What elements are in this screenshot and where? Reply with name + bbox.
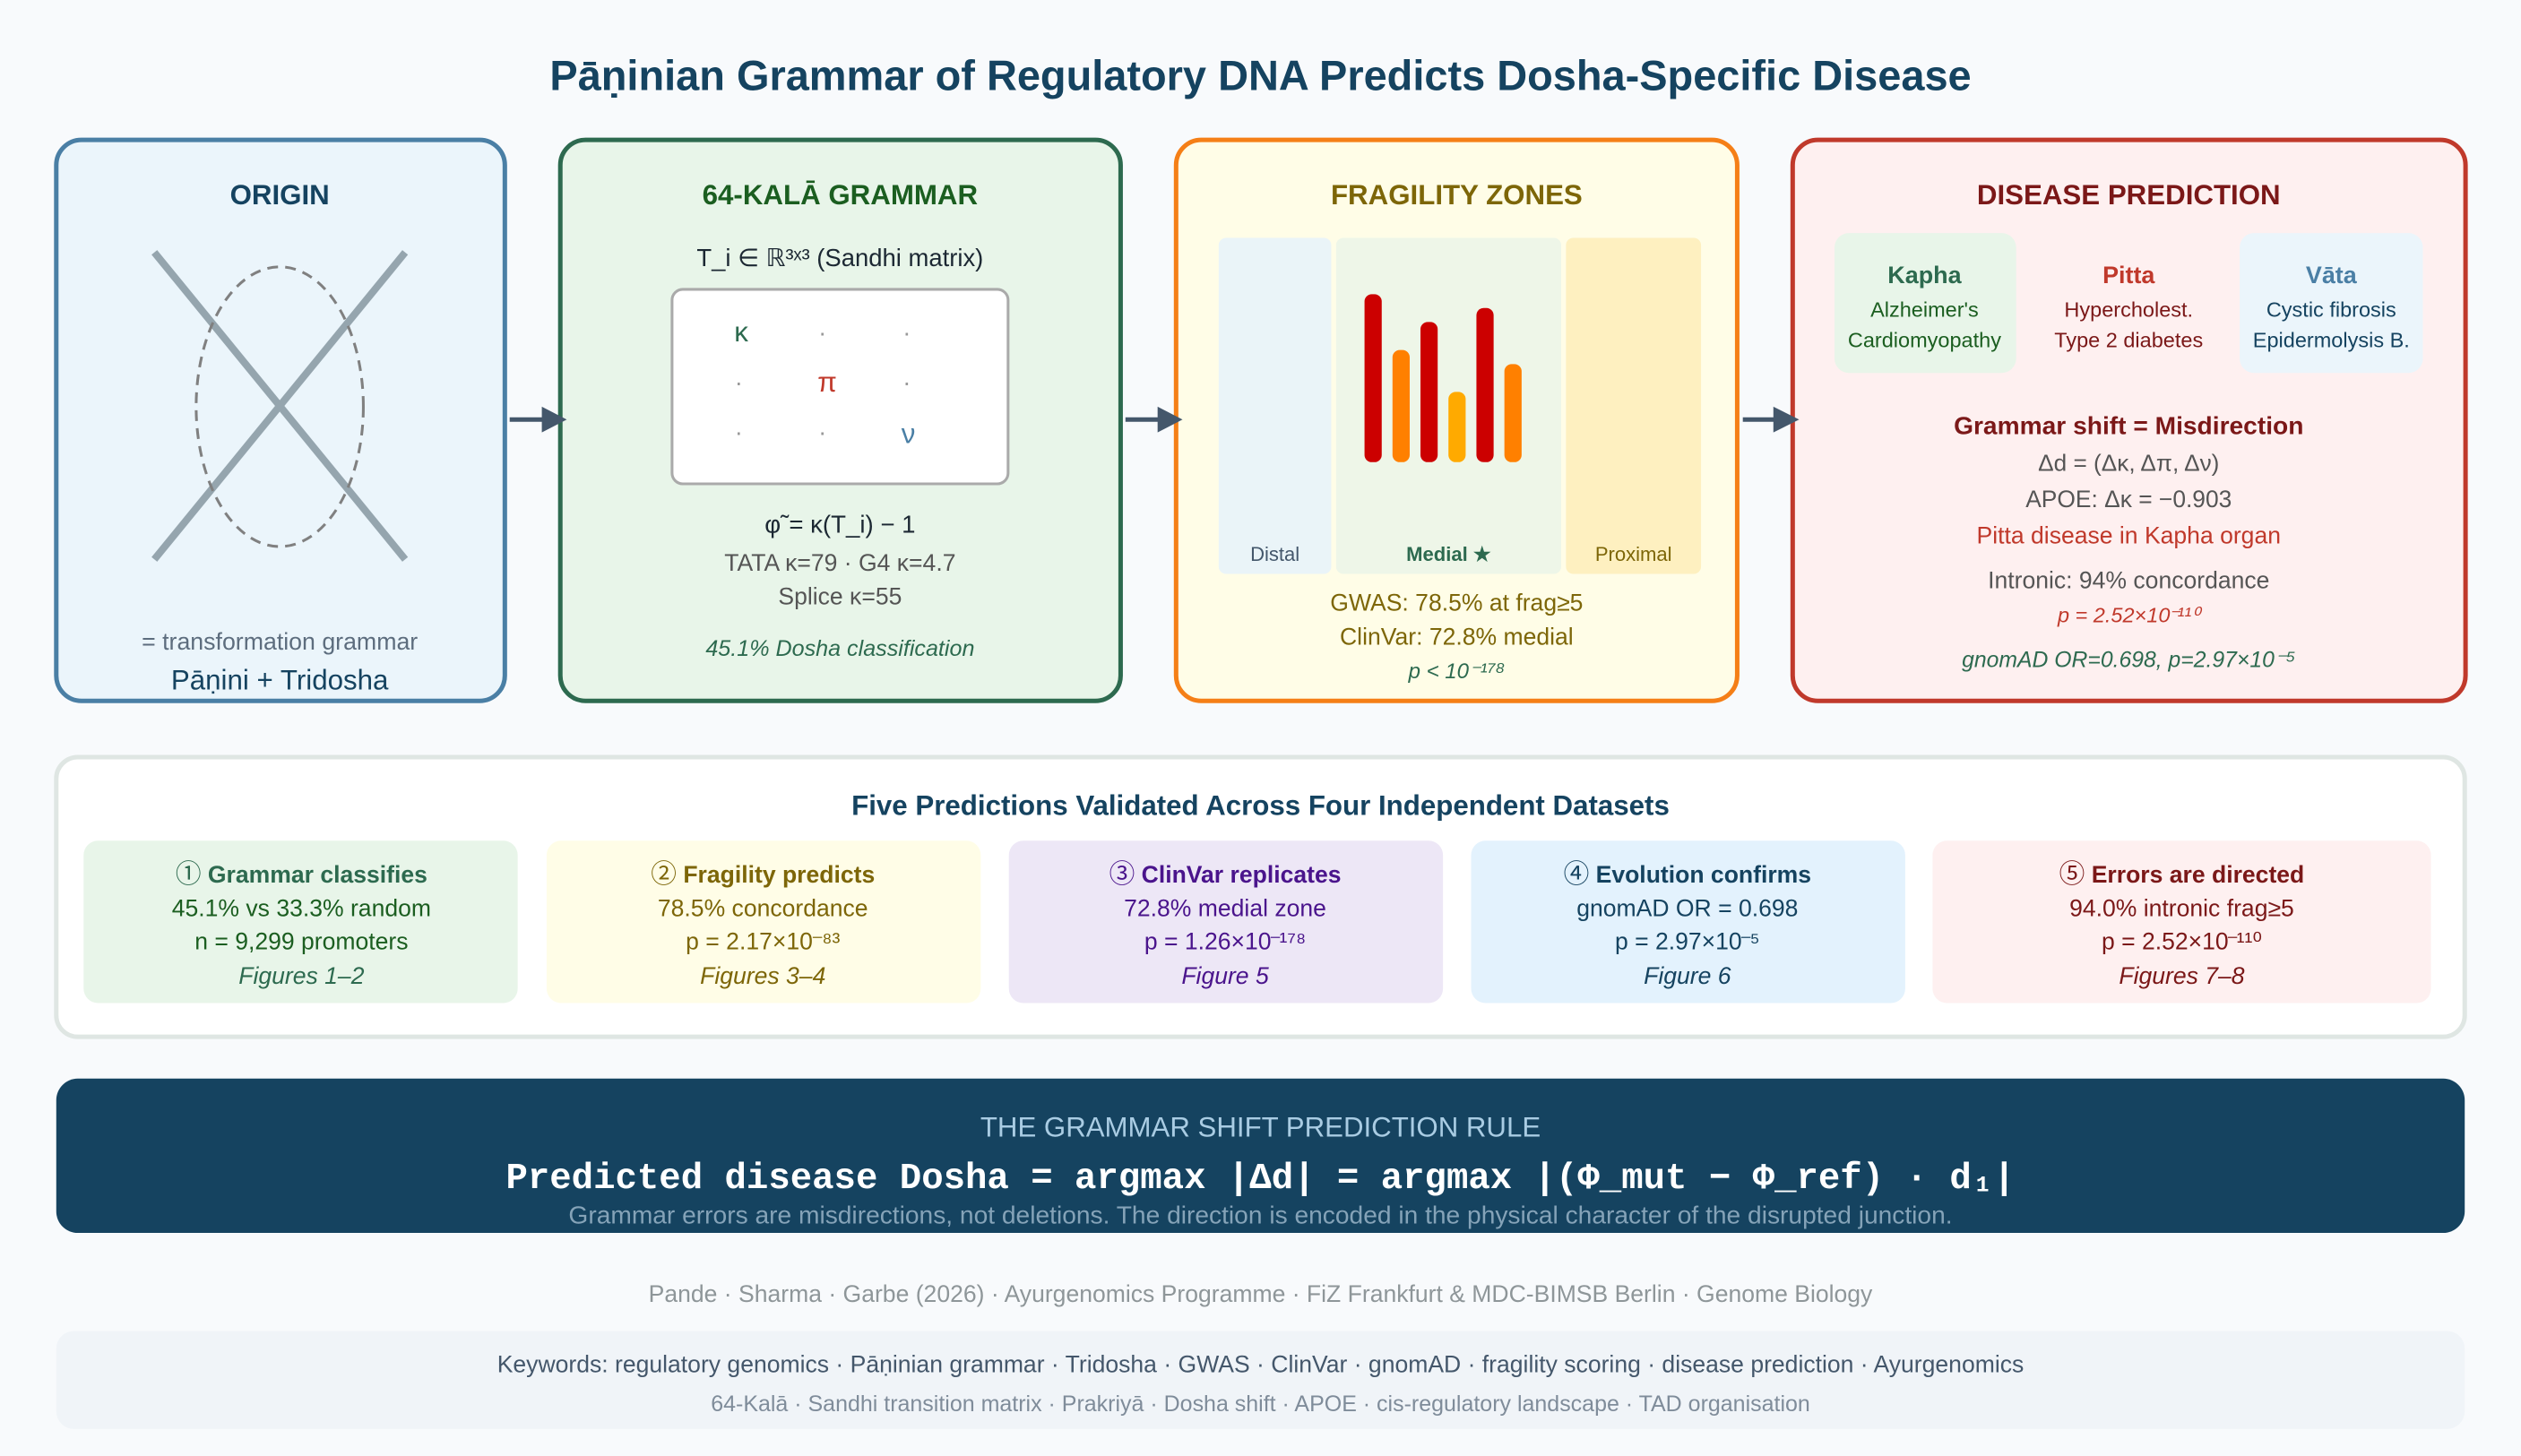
zone: medial: Medial ★ — [1406, 543, 1491, 565]
card: prediction 3: Figure 5 — [1181, 962, 1269, 989]
text: GWAS statistic: GWAS: 78.5% at frag≥5 — [1330, 590, 1583, 616]
card: prediction 2 — [547, 840, 980, 1003]
card: Pitta: Type 2 diabetes — [2054, 329, 2203, 352]
zone: proximal — [1566, 238, 1701, 573]
icon: crossed strands with dashed ellipse — [154, 253, 405, 559]
card: prediction 2: 78.5% concordance — [658, 895, 868, 922]
matrix: 3x3 Sandhi transition: · — [735, 368, 743, 396]
matrix: 3x3 Sandhi transition — [672, 289, 1008, 484]
card: prediction 4 — [1472, 840, 1905, 1003]
card: prediction 4: Figure 6 — [1644, 962, 1731, 989]
text: intronic concordance: Intronic: 94% concordance — [1988, 567, 2269, 594]
heading: disease prediction: DISEASE PREDICTION — [1977, 179, 2281, 211]
matrix: 3x3 Sandhi transition: · — [902, 368, 911, 396]
card: prediction 5: ⑤ Errors are directed — [2059, 854, 2304, 891]
text: intronic p value: p = 2.52×10⁻¹¹⁰ — [2057, 603, 2203, 626]
card: prediction 3 — [1009, 840, 1443, 1003]
card: Kapha: Kapha — [1887, 262, 1963, 289]
text: Pitta in Kapha organ: Pitta disease in Kapha organ — [1977, 521, 2281, 548]
formula: delta d: Δd = (Δκ, Δπ, Δν) — [2038, 450, 2219, 477]
panel: keywords — [56, 1331, 2465, 1429]
card: prediction 4: ④ Evolution confirms — [1564, 854, 1811, 891]
text: grammar shift heading: Grammar shift = Misdirection — [1954, 411, 2303, 439]
card: prediction 5: p = 2.52×10⁻¹¹⁰ — [2102, 928, 2262, 955]
card: prediction 2: p = 2.17×10⁻⁸³ — [686, 928, 841, 955]
matrix: 3x3 Sandhi transition: π — [817, 366, 837, 398]
text: APOE shift: APOE: Δκ = −0.903 — [2025, 486, 2232, 513]
matrix: 3x3 Sandhi transition: κ — [734, 316, 748, 348]
banner: grammar shift prediction rule — [56, 1079, 2465, 1233]
matrix: 3x3 Sandhi transition: · — [818, 418, 826, 446]
zone: distal — [1219, 238, 1331, 573]
matrix: 3x3 Sandhi transition: · — [735, 418, 743, 446]
card: Pitta: Hypercholest. — [2064, 297, 2193, 321]
card: Pitta: Pitta — [2102, 262, 2155, 289]
text: gnomAD statistic: gnomAD OR=0.698, p=2.97×10⁻⁵ — [1962, 649, 2295, 673]
arrow: origin to grammar — [510, 407, 566, 433]
text: splice kappa: Splice κ=55 — [778, 583, 902, 610]
panel: five predictions — [56, 757, 2465, 1037]
title: Pāṇinian Grammar of Regulatory DNA Predicts Dosha-Specific Disease — [549, 52, 1972, 99]
card: prediction 5: Figures 7–8 — [2119, 962, 2245, 989]
text: kappa values: TATA κ=79 · G4 κ=4.7 — [724, 549, 955, 576]
card: prediction 1: Figures 1–2 — [238, 962, 365, 989]
card: Vata — [2240, 233, 2423, 373]
card: prediction 1: n = 9,299 promoters — [194, 928, 409, 955]
card: prediction 5 — [1932, 840, 2431, 1003]
text: Panini + Tridosha: Pāṇini + Tridosha — [171, 665, 389, 696]
panel: disease prediction — [1792, 140, 2465, 701]
heading: fragility zones: FRAGILITY ZONES — [1331, 179, 1583, 211]
zone: proximal: Proximal — [1595, 543, 1672, 565]
card: prediction 1 — [83, 840, 518, 1003]
card: Kapha: Alzheimer's — [1870, 297, 1979, 321]
panel: fragility zones — [1176, 140, 1737, 701]
arrow: fragility to disease — [1743, 407, 1799, 433]
text: transformation grammar: = transformation grammar — [142, 628, 418, 655]
text: keywords line 1: Keywords: regulatory genomics · Pāṇinian grammar · Tridosha · GWAS · ClinVar · gnomAD · fragility scoring · disease prediction · Ayurgenomics — [497, 1350, 2024, 1377]
arrow: grammar to fragility — [1126, 407, 1182, 433]
heading: five predictions: Five Predictions Validated Across Four Independent Datasets — [851, 790, 1670, 822]
card: prediction 4: p = 2.97×10⁻⁵ — [1615, 928, 1760, 955]
panel: origin — [56, 140, 505, 701]
card: Kapha: Cardiomyopathy — [1848, 329, 2001, 352]
card: Vata: Epidermolysis B. — [2253, 329, 2410, 352]
text: banner note: Grammar errors are misdirections, not deletions. The direction is encoded in the physical character of the disrupted junction. — [568, 1201, 1953, 1228]
text: classification accuracy: 45.1% Dosha classification — [705, 636, 974, 661]
panel: 64-Kala grammar — [560, 140, 1120, 701]
text: keywords line 2: 64-Kalā · Sandhi transition matrix · Prakriyā · Dosha shift · APOE · cis-regulatory landscape · TAD organisation — [711, 1391, 1810, 1417]
card: Vata: Vāta — [2306, 262, 2358, 289]
card: Pitta — [2037, 233, 2221, 373]
text: banner label: THE GRAMMAR SHIFT PREDICTION RULE — [980, 1111, 1541, 1142]
matrix: 3x3 Sandhi transition: · — [818, 318, 826, 346]
text: p value: p < 10⁻¹⁷⁸ — [1408, 659, 1505, 684]
text: authors and affiliations: Pande · Sharma · Garbe (2026) · Ayurgenomics Programme · FiZ Frankfurt & MDC-BIMSB Berlin · Genome Biology — [649, 1280, 1873, 1307]
heading: origin: ORIGIN — [230, 179, 330, 211]
card: prediction 1: ① Grammar classifies — [176, 854, 427, 891]
card: prediction 3: p = 1.26×10⁻¹⁷⁸ — [1144, 928, 1306, 955]
heading: 64-Kala grammar: 64-KALĀ GRAMMAR — [703, 179, 978, 211]
matrix: 3x3 Sandhi transition: ν — [902, 418, 915, 449]
card: prediction 5: 94.0% intronic frag≥5 — [2069, 895, 2294, 922]
card: prediction 2: Figures 3–4 — [700, 962, 825, 989]
card: prediction 4: gnomAD OR = 0.698 — [1576, 895, 1798, 922]
formula: prediction rule: Predicted disease Dosha = argmax |Δd| = argmax |(Φ_mut − Φ_ref) · d₁| — [505, 1159, 2016, 1200]
text: Sandhi matrix definition: T_i ∈ ℝ³ˣ³ (Sandhi matrix) — [696, 244, 983, 271]
zone: medial — [1336, 238, 1561, 573]
bar chart: fragility peaks — [1365, 294, 1522, 462]
zone: distal: Distal — [1250, 543, 1299, 565]
card: prediction 1: 45.1% vs 33.3% random — [172, 895, 431, 922]
card: prediction 2: ② Fragility predicts — [651, 854, 875, 891]
card: prediction 3: ③ ClinVar replicates — [1109, 854, 1341, 891]
card: prediction 3: 72.8% medial zone — [1124, 895, 1326, 922]
text: ClinVar statistic: ClinVar: 72.8% medial — [1340, 623, 1574, 650]
card: Vata: Cystic fibrosis — [2266, 297, 2396, 321]
formula: curvature: φ˜= κ(T_i) − 1 — [764, 511, 916, 538]
matrix: 3x3 Sandhi transition: · — [902, 318, 911, 346]
card: Kapha — [1835, 233, 2016, 373]
